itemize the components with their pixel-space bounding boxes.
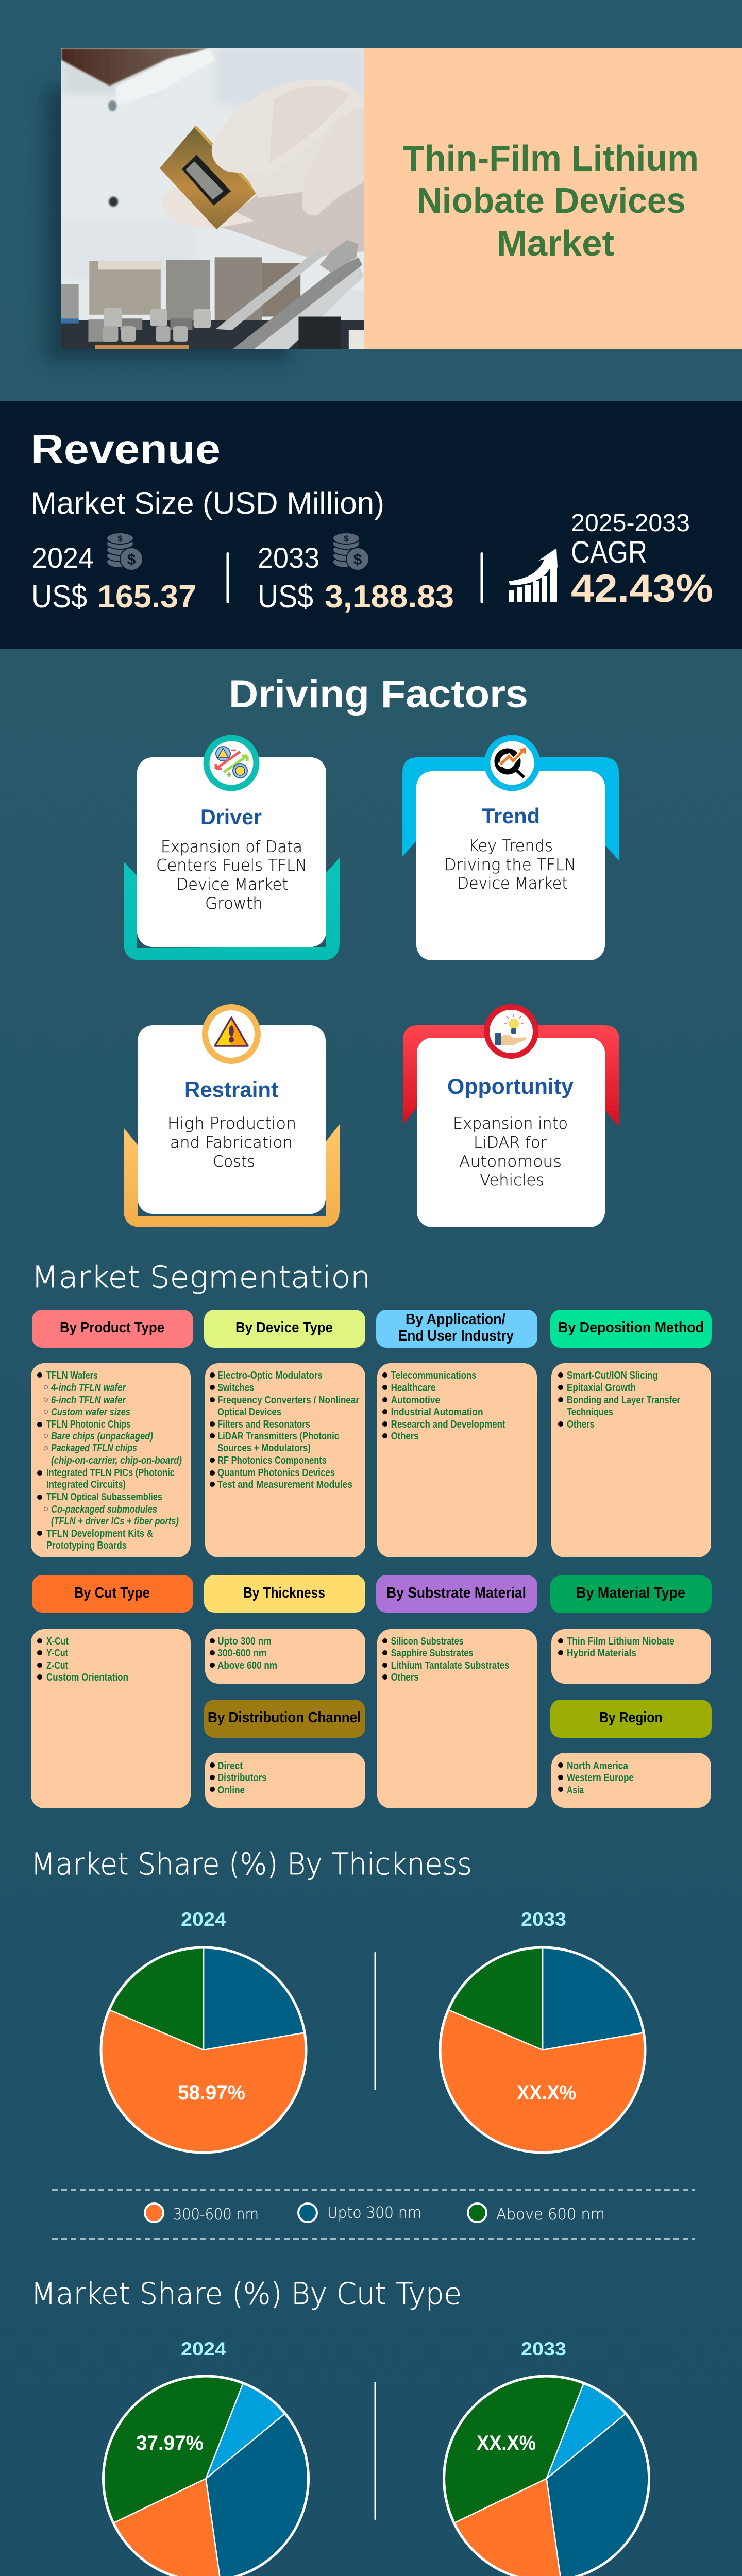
- segment: by region: By Region: [599, 1709, 663, 1726]
- card title: Driver: [200, 805, 262, 829]
- segment: by cut type: Custom Orientation: [46, 1672, 128, 1683]
- segment: by device type: Sources + Modulators): [217, 1443, 311, 1454]
- 2024 value block: [31, 533, 196, 615]
- segment: by device type: Switches: [217, 1382, 254, 1394]
- value label: 58.97%: [178, 2081, 245, 2104]
- pie chart: cut type 2024: [103, 2376, 308, 2576]
- market size label: Market Size (USD Million): [31, 486, 384, 520]
- segment: by distribution channel: [204, 1700, 365, 1808]
- card text: [444, 837, 576, 893]
- CAGR block: CAGR: [571, 535, 647, 569]
- segment: by cut type: By Cut Type: [74, 1585, 150, 1601]
- heading: market segmentation: Market Segmentation: [31, 1260, 370, 1295]
- segment: by device type: Frequency Converters / Nonlinear: [217, 1395, 359, 1406]
- segment: by material type: By Material Type: [576, 1585, 685, 1601]
- title: Thin-Film Lithium: [403, 138, 699, 178]
- legend: thickness: Upto 300 nm: [327, 2204, 421, 2222]
- icon: coins 2033: [333, 533, 369, 570]
- card text: [453, 1114, 568, 1190]
- revenue panel: [0, 401, 742, 649]
- segment: by device type: [204, 1310, 365, 1557]
- year label 2024: 2024: [181, 1909, 226, 1930]
- card text: Device Market: [176, 875, 288, 894]
- segment: by distribution channel: Online: [217, 1785, 245, 1796]
- 2024 value block: 2024: [32, 541, 94, 574]
- segment: by product type: (chip-on-carrier, chip-on-board): [51, 1455, 182, 1466]
- card text: and Fabrication: [170, 1133, 293, 1152]
- segment: by product type: TFLN Photonic Chips: [46, 1419, 131, 1430]
- segment: by application / end user industry: End User Industry: [398, 1328, 514, 1344]
- card: driver: [124, 735, 340, 960]
- heading: market share by cut type: Market Share (%) By Cut Type: [31, 2276, 462, 2311]
- card title: Restraint: [184, 1077, 278, 1101]
- value label: 37.97%: [136, 2432, 204, 2454]
- 2033 value block: [258, 533, 454, 615]
- segment: by product type: Packaged TFLN chips: [51, 1443, 137, 1454]
- CAGR block: 42.43%: [571, 567, 713, 611]
- segment: by substrate material: Lithium Tantalate Substrates: [391, 1660, 510, 1671]
- segment: by application / end user industry: Healthcare: [391, 1382, 436, 1394]
- segment: by region: Asia: [567, 1785, 584, 1796]
- segment: by product type: Integrated Circuits): [46, 1479, 126, 1490]
- icon: coins 2024: [107, 533, 143, 570]
- segment: by application / end user industry: [376, 1310, 537, 1557]
- segment: by thickness: Upto 300 nm: [217, 1636, 272, 1647]
- segment: by material type: [550, 1575, 712, 1684]
- icon: trend: [484, 735, 540, 791]
- segment: by application / end user industry: Automotive: [391, 1395, 440, 1406]
- segment: by cut type: Y-Cut: [46, 1648, 68, 1659]
- card text: Vehicles: [480, 1171, 544, 1190]
- segment: by product type: Prototyping Boards: [46, 1540, 127, 1551]
- card text: Expansion into: [453, 1114, 568, 1133]
- segment: by deposition method: Smart-Cut/ION Slicing: [567, 1370, 658, 1381]
- card text: Driving the TFLN: [444, 856, 576, 874]
- segment: by thickness: By Thickness: [243, 1585, 325, 1601]
- icon: coins 2024: $: [127, 551, 136, 568]
- segment: by cut type: X-Cut: [46, 1636, 69, 1647]
- year label 2033: 2033: [521, 1909, 566, 1930]
- 2033 value block: US$: [258, 579, 313, 615]
- segment: by product type: TFLN Development Kits &: [46, 1528, 153, 1539]
- year label 2024: 2024: [181, 2338, 226, 2360]
- card title: Opportunity: [447, 1074, 574, 1098]
- segment: by substrate material: [376, 1575, 537, 1808]
- card text: Key Trends: [468, 837, 553, 855]
- title: Niobate Devices: [417, 180, 686, 221]
- pie chart: thickness 2033: [440, 1947, 645, 2153]
- card: opportunity: [403, 1004, 619, 1227]
- segment: by deposition method: Techniques: [567, 1406, 613, 1418]
- segment: by cut type: Z-Cut: [46, 1660, 68, 1671]
- legend: thickness: [145, 2204, 605, 2224]
- card text: High Production: [167, 1114, 296, 1133]
- 2024 value block: 165.37: [97, 579, 196, 615]
- segment: by product type: Co-packaged submodules: [51, 1504, 157, 1515]
- title panel: [364, 48, 742, 349]
- segment: by application / end user industry: By Application/: [406, 1311, 505, 1328]
- segment: by distribution channel: Direct: [217, 1760, 243, 1772]
- year label 2033: 2033: [521, 2338, 566, 2360]
- segment: by product type: Bare chips (unpackaged): [51, 1431, 153, 1442]
- 2033 value block: 3,188.83: [325, 579, 454, 615]
- card text: Device Market: [457, 874, 568, 893]
- segment: by deposition method: Others: [567, 1419, 595, 1430]
- divider: [480, 552, 483, 603]
- title: [403, 138, 699, 263]
- segment: by application / end user industry: Others: [391, 1431, 419, 1442]
- segment: by application / end user industry: Telecommunications: [391, 1370, 477, 1381]
- segment: by device type: LiDAR Transmitters (Photonic: [217, 1431, 339, 1442]
- segment: by material type: Hybrid Materials: [567, 1648, 636, 1659]
- pie chart: cut type 2033: [444, 2376, 649, 2576]
- segment: by deposition method: By Deposition Method: [558, 1319, 704, 1336]
- card text: LiDAR for: [474, 1133, 547, 1152]
- icon: coins 2033: $: [344, 534, 349, 544]
- 2033 value block: 2033: [258, 541, 319, 574]
- card text: Centers Fuels TFLN: [156, 856, 307, 875]
- hero panel: [46, 48, 742, 361]
- icon: coins 2033: $: [353, 551, 362, 568]
- card text: Autonomous: [459, 1153, 562, 1171]
- segment: by product type: TFLN Wafers: [46, 1370, 98, 1381]
- segment: by product type: 6-inch TFLN wafer: [51, 1395, 126, 1406]
- segment: by application / end user industry: Research and Development: [391, 1419, 505, 1430]
- CAGR block: 2025-2033: [571, 510, 690, 537]
- segment: by thickness: [204, 1575, 365, 1684]
- segment: by device type: RF Photonics Components: [217, 1455, 327, 1466]
- card text: Growth: [205, 894, 263, 913]
- segment: by region: North America: [567, 1760, 629, 1772]
- segment: by deposition method: [550, 1310, 712, 1557]
- segment: by product type: By Product Type: [60, 1319, 164, 1336]
- segment: by substrate material: By Substrate Material: [386, 1585, 526, 1601]
- value label: XX.X%: [477, 2432, 536, 2454]
- segment: by substrate material: Others: [391, 1672, 419, 1683]
- segment: by device type: Filters and Resonators: [217, 1419, 310, 1430]
- segment: by deposition method: Bonding and Layer Transfer: [567, 1395, 680, 1406]
- icon: growth arrow: [509, 548, 558, 602]
- card: restraint: [124, 1004, 340, 1227]
- segment: by deposition method: Epitaxial Growth: [567, 1382, 636, 1394]
- card: trend: [402, 735, 619, 960]
- value label: XX.X%: [517, 2081, 576, 2104]
- segment: by product type: Integrated TFLN PICs (Photonic: [46, 1467, 175, 1479]
- segment: by device type: Test and Measurement Modules: [217, 1479, 352, 1490]
- segment: by product type: 4-inch TFLN wafer: [50, 1382, 126, 1394]
- segment: by device type: Optical Devices: [217, 1406, 281, 1418]
- segment: by substrate material: Sapphire Substrates: [391, 1648, 474, 1659]
- segment: by substrate material: Silicon Substrates: [391, 1636, 464, 1647]
- revenue heading: Revenue: [31, 426, 221, 472]
- segment: by region: Western Europe: [567, 1772, 634, 1784]
- icon: coins 2024: $: [117, 534, 123, 544]
- icon: opportunity: [484, 1004, 538, 1059]
- segment: by thickness: 300-600 nm: [217, 1648, 267, 1659]
- segment: by cut type: [31, 1575, 193, 1808]
- segment: by device type: By Device Type: [235, 1319, 333, 1336]
- segment: by thickness: Above 600 nm: [217, 1660, 277, 1671]
- 2024 value block: US$: [31, 579, 87, 615]
- segment: by distribution channel: Distributors: [217, 1772, 267, 1784]
- card text: Costs: [213, 1153, 255, 1171]
- card title: Trend: [482, 804, 540, 828]
- segment: by product type: Custom wafer sizes: [51, 1406, 130, 1418]
- segment: by application / end user industry: Industrial Automation: [391, 1406, 483, 1418]
- segment: by distribution channel: By Distribution Channel: [208, 1709, 361, 1726]
- icon: restraint: [202, 1004, 261, 1064]
- segment: by region: [550, 1700, 712, 1808]
- segment: by product type: [31, 1310, 193, 1557]
- card text: [167, 1114, 296, 1171]
- segment: by product type: (TFLN + driver ICs + fiber ports): [51, 1516, 179, 1527]
- segment: by product type: TFLN Optical Subassemblies: [46, 1492, 162, 1503]
- hero photo: gloved hand holding chip: [61, 48, 364, 349]
- legend: thickness: Above 600 nm: [496, 2206, 605, 2224]
- icon: driver: [203, 735, 260, 791]
- CAGR block: [571, 510, 713, 611]
- heading: driving factors: Driving Factors: [229, 672, 528, 716]
- card text: [156, 838, 307, 913]
- segment: by device type: Quantum Photonics Devices: [217, 1467, 335, 1479]
- card text: Expansion of Data: [161, 838, 302, 856]
- heading: market share by thickness: Market Share (%) By Thickness: [31, 1846, 472, 1882]
- segment: by material type: Thin Film Lithium Niobate: [567, 1636, 674, 1647]
- divider: [227, 552, 229, 603]
- title: Market: [497, 223, 614, 263]
- pie chart: thickness 2024: [101, 1947, 306, 2153]
- segment: by device type: Electro-Optic Modulators: [217, 1370, 323, 1381]
- legend: thickness: 300-600 nm: [173, 2206, 259, 2224]
